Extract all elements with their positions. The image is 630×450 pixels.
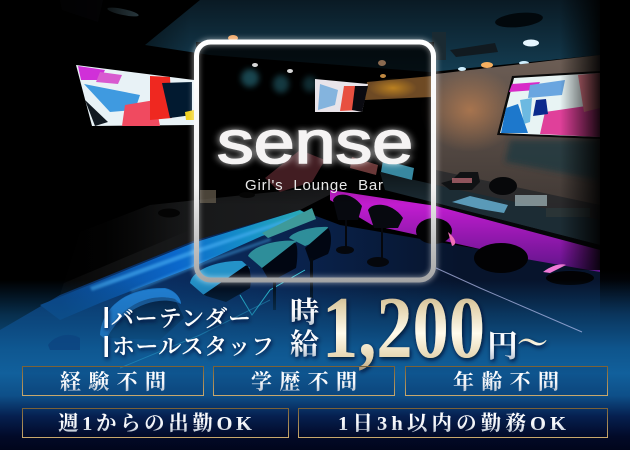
counter right top	[380, 172, 600, 245]
fourth stool	[289, 227, 328, 246]
bottom blue gradient panel	[0, 280, 630, 450]
badge: once a week	[22, 408, 288, 438]
wall fade to counter	[436, 170, 589, 208]
right fade	[560, 0, 600, 270]
badge: no age requirement: 年齢不問	[453, 370, 559, 394]
purple led band	[330, 190, 600, 272]
frame stroke	[196, 42, 434, 280]
floor details over gradient	[48, 268, 582, 368]
ceiling	[145, 0, 600, 72]
icon: right tv screen	[497, 71, 600, 139]
bullet bar	[104, 307, 108, 328]
box dark interior	[196, 42, 434, 205]
stools blue side	[100, 227, 331, 340]
blue led band	[40, 210, 316, 320]
title: hall staff: ホールスタッフ	[112, 334, 274, 359]
logo word glow: sense	[217, 109, 413, 176]
label: ji: 時	[290, 296, 319, 329]
yen unit: 円	[487, 329, 518, 364]
job titles	[104, 306, 274, 359]
panel: logo box	[196, 42, 434, 280]
ceiling fixtures	[108, 8, 543, 71]
badge: no experience: 経験不問	[60, 370, 166, 394]
badge: no education requirement	[214, 366, 394, 396]
photo: lounge interior	[0, 0, 600, 349]
in-box orange wall	[365, 76, 432, 100]
right edge floor blend	[600, 270, 630, 450]
left fade	[60, 0, 177, 276]
stools purple side	[333, 195, 594, 285]
wage number: 1,200	[322, 280, 485, 377]
hourly wage	[290, 280, 548, 377]
wall shadow below tv	[505, 140, 600, 180]
logo word: sense	[217, 109, 413, 176]
front stool	[100, 288, 181, 338]
bar counter left	[72, 186, 334, 287]
badge: within 3 hours	[298, 408, 608, 438]
ceiling light above logo	[228, 35, 238, 41]
third stool	[248, 241, 296, 268]
counter dark edge	[439, 204, 566, 236]
counter hole	[158, 208, 180, 218]
badge: no education requirement: 学歴不問	[251, 370, 357, 394]
in-box tv	[315, 79, 368, 112]
second stool	[190, 261, 250, 296]
badge: no experience	[22, 366, 204, 396]
badge: within 3 hours: 1日3h以内の勤務OK	[338, 412, 566, 435]
in-box counter art	[200, 150, 414, 203]
tilde: ～	[517, 326, 548, 361]
bullet bar	[104, 336, 108, 357]
back wall right	[436, 55, 600, 225]
counter items	[441, 172, 590, 217]
frame glow	[196, 42, 434, 280]
in-box wall spots	[241, 60, 386, 93]
step ledge	[262, 208, 316, 238]
badge: no age requirement	[406, 366, 608, 396]
led streaks	[90, 216, 297, 293]
label: kyu: 給	[290, 328, 319, 361]
badge: once a week: 週1からの出勤OK	[58, 412, 252, 435]
legs and rails	[240, 270, 305, 315]
floor	[0, 210, 600, 349]
icon: left tv screen	[76, 65, 194, 126]
logo tagline: Girl's Lounge Bar	[245, 177, 383, 194]
title: bartender: バーテンダー	[111, 306, 251, 331]
